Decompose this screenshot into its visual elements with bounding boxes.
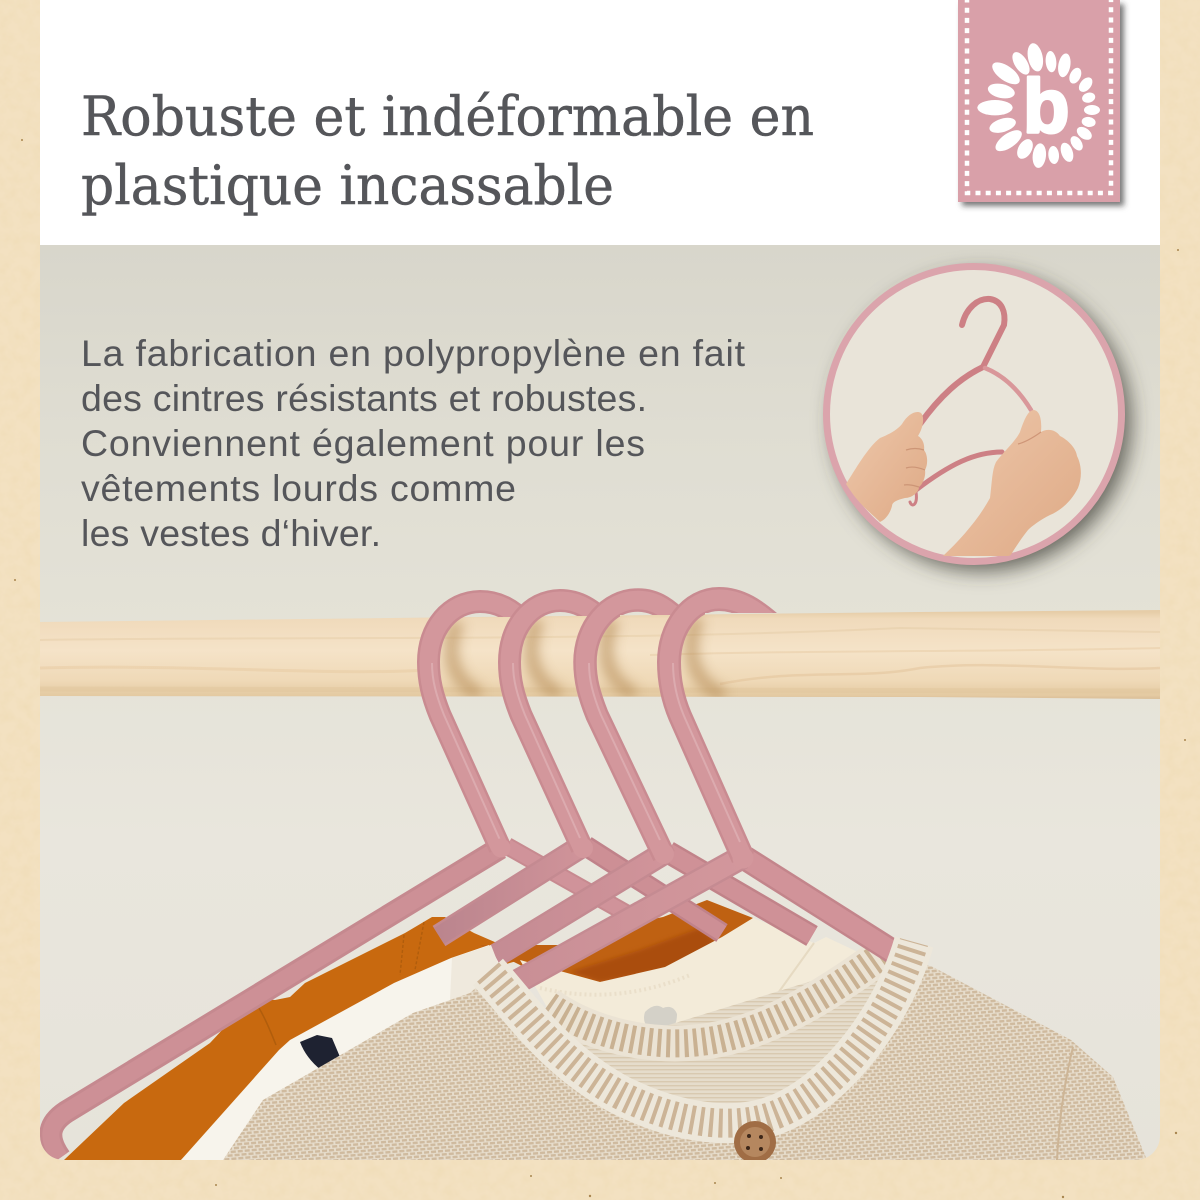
icon: sunflower petals: [977, 42, 1100, 169]
clothing: cream undershirt neck: [520, 918, 856, 1026]
photo panel: [40, 245, 1160, 1163]
wooden rod: [40, 610, 1160, 699]
hook shadows on rod: [451, 618, 724, 696]
body text: La fabrication en polypropylène en fait: [81, 332, 746, 374]
front collar rib: [488, 942, 914, 1123]
clothing: orange shirt: [64, 900, 753, 1160]
wall background: [40, 245, 1160, 1160]
title: [81, 85, 814, 217]
body text: les vestes d‘hiver.: [81, 512, 381, 554]
back collar rib: [548, 955, 882, 1043]
clothing: knit cardigan: [223, 942, 1147, 1163]
hanger 3: [492, 600, 812, 958]
navy dot: [300, 1035, 340, 1070]
inset photo: hands bending hanger: [825, 265, 1123, 563]
hanger 4: [515, 599, 895, 983]
body text: Conviennent également pour les: [81, 422, 645, 464]
wooden button: [734, 1121, 776, 1163]
clothing: white shirt: [181, 945, 500, 1160]
title: plastique incassable: [81, 154, 614, 217]
hanger 1: [51, 602, 640, 1158]
left hand: [846, 412, 927, 522]
body text: vêtements lourds comme: [81, 467, 516, 509]
right hand: [943, 410, 1081, 556]
logo letter: b: [1023, 64, 1069, 149]
clothing: cardigan inner back: [546, 949, 886, 1103]
body text: [81, 332, 746, 554]
hanger 2: [439, 600, 722, 936]
header panel: [40, 0, 1160, 245]
bent hanger: [910, 299, 1031, 505]
body text: des cintres résistants et robustes.: [81, 377, 647, 419]
title: Robuste et indéformable en: [81, 85, 814, 148]
brand tag logo: [958, 0, 1120, 202]
